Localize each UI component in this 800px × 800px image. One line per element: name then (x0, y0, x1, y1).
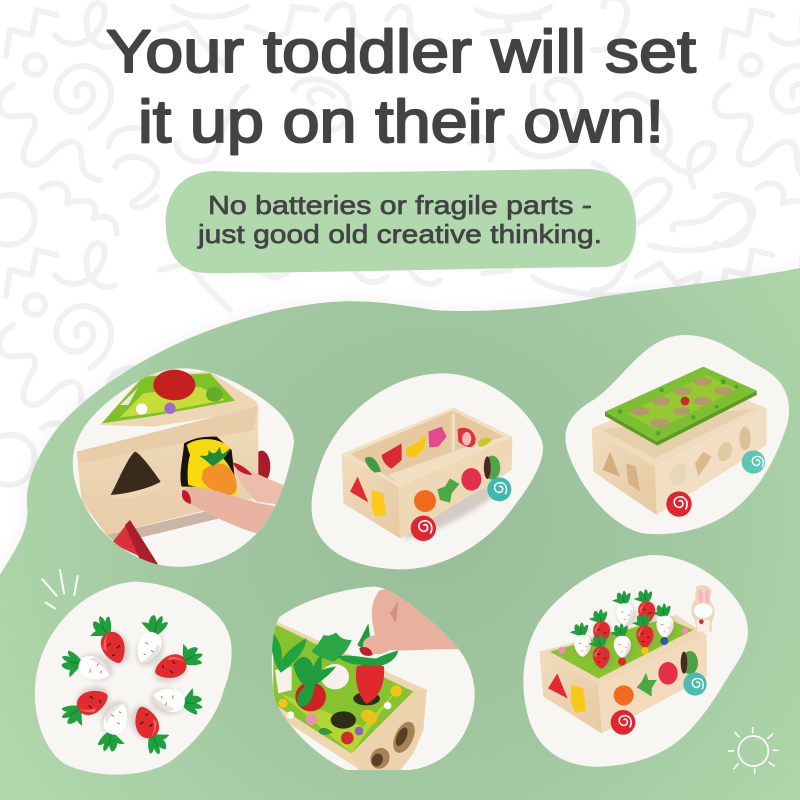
little decorations (391, 685, 402, 697)
green lid (605, 391, 757, 446)
wood box (342, 407, 512, 487)
veg in cart (570, 589, 676, 670)
subtitle pill (166, 169, 636, 273)
photo: ring of carrots and radishes (35, 570, 232, 775)
photo: finger pressing pineapple into shape sorter (72, 368, 294, 567)
subtitle text: just good old creative thinking. (197, 219, 602, 249)
vegetables (275, 667, 292, 693)
box (273, 620, 427, 770)
box rim and top (100, 372, 258, 427)
subtitle text: No batteries or fragile parts - (208, 190, 592, 220)
hand (363, 589, 461, 654)
title (106, 18, 696, 155)
photo: box with green planting lid (565, 335, 789, 534)
icon: sun (728, 728, 778, 773)
triangle hole (110, 452, 165, 499)
wood front (77, 406, 258, 535)
small beads (558, 647, 566, 654)
photo: hand lifting carrot from garden box (272, 586, 475, 770)
carrots (85, 610, 134, 671)
fruit shapes (548, 673, 568, 698)
cart box (539, 615, 707, 685)
red triangle block (112, 520, 158, 565)
fruits inside (365, 427, 492, 473)
green background blob (0, 268, 800, 800)
wheels (611, 710, 635, 735)
bunny (691, 585, 715, 633)
box cutouts (603, 452, 620, 477)
background squiggle pattern (0, 0, 800, 535)
photo: assembled carrot garden cart with bunny (523, 555, 748, 767)
subtitle text (197, 190, 602, 249)
wheels (411, 516, 436, 541)
wheels (666, 491, 692, 517)
wood box (592, 400, 767, 467)
fruits on left face (350, 477, 368, 502)
photo: open box with fruit shapes (312, 373, 543, 569)
leaves (272, 634, 307, 673)
pineapple piece (181, 437, 237, 496)
hand (184, 486, 275, 534)
title: it up on their own! (138, 88, 664, 155)
icon: sparkle lines (42, 570, 78, 608)
fruits on right face (414, 490, 436, 512)
title: Your toddler will set (106, 18, 696, 85)
